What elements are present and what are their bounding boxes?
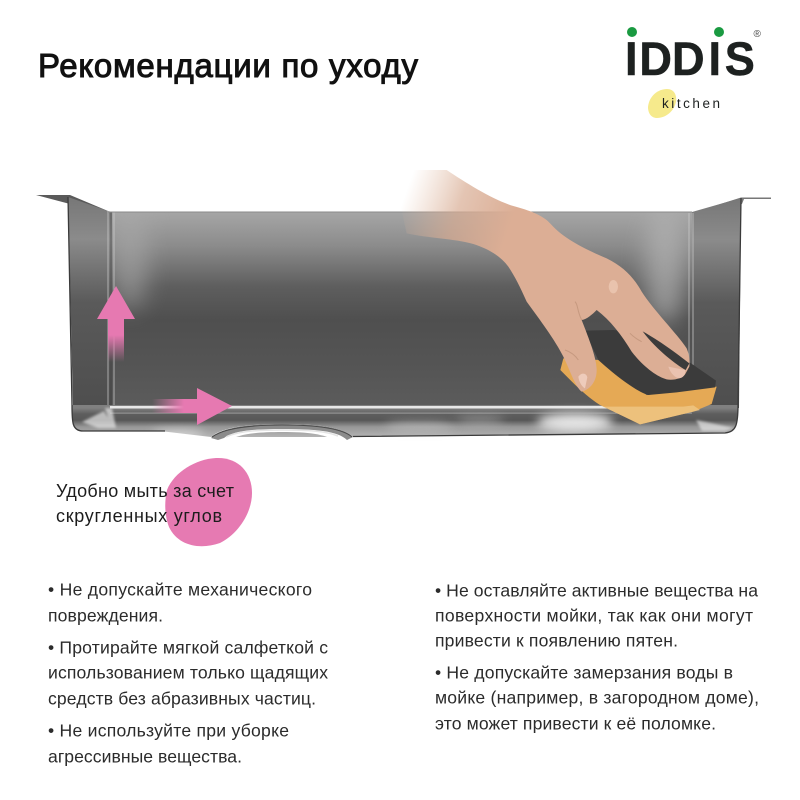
right side wall [692, 198, 741, 408]
sponge body [560, 358, 717, 424]
left side wall [68, 197, 112, 408]
corner creases [108, 211, 114, 405]
drain cutout [211, 424, 353, 441]
arrow: right [152, 388, 232, 425]
text block: right column: поверхности мойки, так как они могут [435, 606, 753, 626]
pink blob [165, 458, 252, 546]
floor lip [72, 405, 738, 437]
back wall [112, 212, 692, 408]
sponge gap between fingers [643, 331, 689, 370]
sponge abrasive top [584, 330, 716, 395]
floor highlights [537, 413, 613, 431]
left flange [36, 195, 108, 211]
sink illustration [36, 195, 771, 441]
callout: blob with text: Удобно мыть за счет [56, 481, 234, 501]
text block: left column: повреждения. [48, 606, 163, 626]
logo: IDDIS kitchen [625, 27, 762, 118]
text block: right column [435, 580, 759, 734]
arrow: up [97, 286, 135, 362]
text block: right column: привести к появлению пятен. [435, 630, 678, 650]
text block: left column: • Не допускайте механического [48, 580, 312, 600]
text block: right column: это может привести к её поломке. [435, 714, 716, 734]
callout: blob with text [56, 458, 252, 546]
outline [68, 197, 165, 431]
callout: blob with text: скругленных углов [56, 506, 222, 526]
right flange [692, 198, 771, 213]
finger creases [565, 302, 642, 360]
title: Рекомендации по уходу [38, 47, 418, 84]
finger nail [668, 367, 685, 378]
text block: left column: использованием только щадящих [48, 662, 328, 682]
text block: left column: агрессивные вещества. [48, 746, 242, 766]
thumb nail [578, 374, 587, 388]
text block: left column: • Протирайте мягкой салфеткой с [48, 638, 328, 658]
logo: IDDIS kitchen: ® [754, 29, 762, 40]
text block: left column: средств без абразивных частиц. [48, 688, 316, 708]
logo: IDDIS kitchen: kitchen [662, 96, 720, 111]
text block: right column: • Не допускайте замерзания воды в [435, 662, 733, 682]
text block: right column: • Не оставляйте активные вещества на [435, 580, 758, 600]
logo: IDDIS kitchen: IDDIS [625, 32, 755, 85]
knuckle shading [609, 280, 618, 293]
text block: right column: мойке (например, в загородном доме), [435, 688, 759, 708]
hand with sponge [400, 170, 717, 424]
text block: left column [48, 580, 328, 766]
text block: left column: • Не используйте при уборке [48, 720, 289, 740]
corner highlight [82, 408, 116, 428]
corner sheen [112, 200, 685, 325]
hand [400, 170, 690, 392]
top rim [108, 211, 692, 213]
